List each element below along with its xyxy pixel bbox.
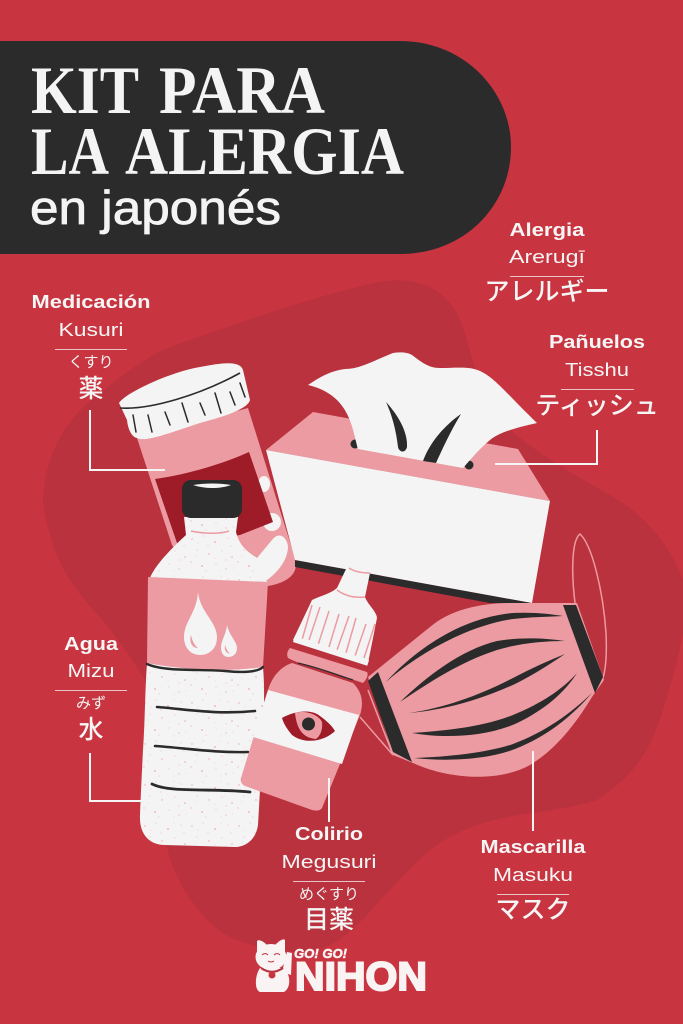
subtitle: en japonés: [30, 181, 281, 234]
label: medicación: Medicación: [32, 292, 150, 312]
logo wordmark: GO! GO!: [294, 946, 348, 961]
icon: tissue box: [266, 352, 550, 603]
icon: water bottle: [140, 480, 268, 847]
label: pañuelos: Tisshu: [565, 359, 629, 380]
label: medicación: Kusuri: [58, 319, 124, 340]
label: mascarilla: マスク: [495, 896, 571, 924]
label: agua: [55, 634, 127, 744]
label: alergia: [484, 220, 610, 306]
label: colirio: めぐすり: [299, 886, 359, 903]
background blob: [43, 280, 683, 952]
leader: pañuelos: [495, 430, 597, 464]
logo wordmark: NIHON: [295, 955, 427, 999]
label: medicación: 薬: [78, 375, 104, 403]
leader: colirio: [328, 778, 330, 822]
icon: pill bottle: [119, 363, 296, 590]
label: alergia: Arerugī: [509, 246, 586, 267]
title: PARA: [159, 52, 325, 128]
label: agua: みず: [76, 695, 106, 712]
title: KIT: [31, 52, 139, 128]
icon: eye: [282, 712, 335, 741]
leader: mascarilla: [532, 751, 534, 831]
label: medicación: [32, 292, 150, 403]
label: mascarilla: Mascarilla: [480, 837, 587, 857]
label: agua: Agua: [64, 634, 119, 654]
icon: face mask: [360, 534, 606, 777]
label: colirio: [282, 824, 376, 934]
label: agua: 水: [78, 716, 104, 744]
label: colirio: Colirio: [295, 824, 363, 844]
icon: lucky cat: [256, 939, 292, 992]
label: colirio: 目薬: [304, 906, 354, 934]
label: agua: Mizu: [68, 660, 114, 681]
header panel: [0, 41, 511, 254]
label: mascarilla: Masuku: [493, 864, 573, 885]
label: alergia: アレルギー: [484, 278, 610, 306]
label: pañuelos: [535, 332, 659, 420]
label: alergia: Alergia: [510, 220, 586, 240]
label: pañuelos: ティッシュ: [535, 392, 659, 420]
icon: eye dropper: [241, 567, 377, 811]
logo: [256, 939, 427, 999]
label: colirio: Megusuri: [282, 851, 376, 872]
leader: agua: [90, 753, 153, 801]
title: LA: [31, 113, 109, 189]
label: mascarilla: [480, 837, 587, 924]
label: medicación: くすり: [68, 354, 114, 371]
title: [31, 52, 404, 189]
icon: water drops: [184, 592, 237, 657]
title: ALERGIA: [125, 113, 404, 189]
leader: medicación: [90, 410, 165, 470]
label: pañuelos: Pañuelos: [549, 332, 645, 352]
